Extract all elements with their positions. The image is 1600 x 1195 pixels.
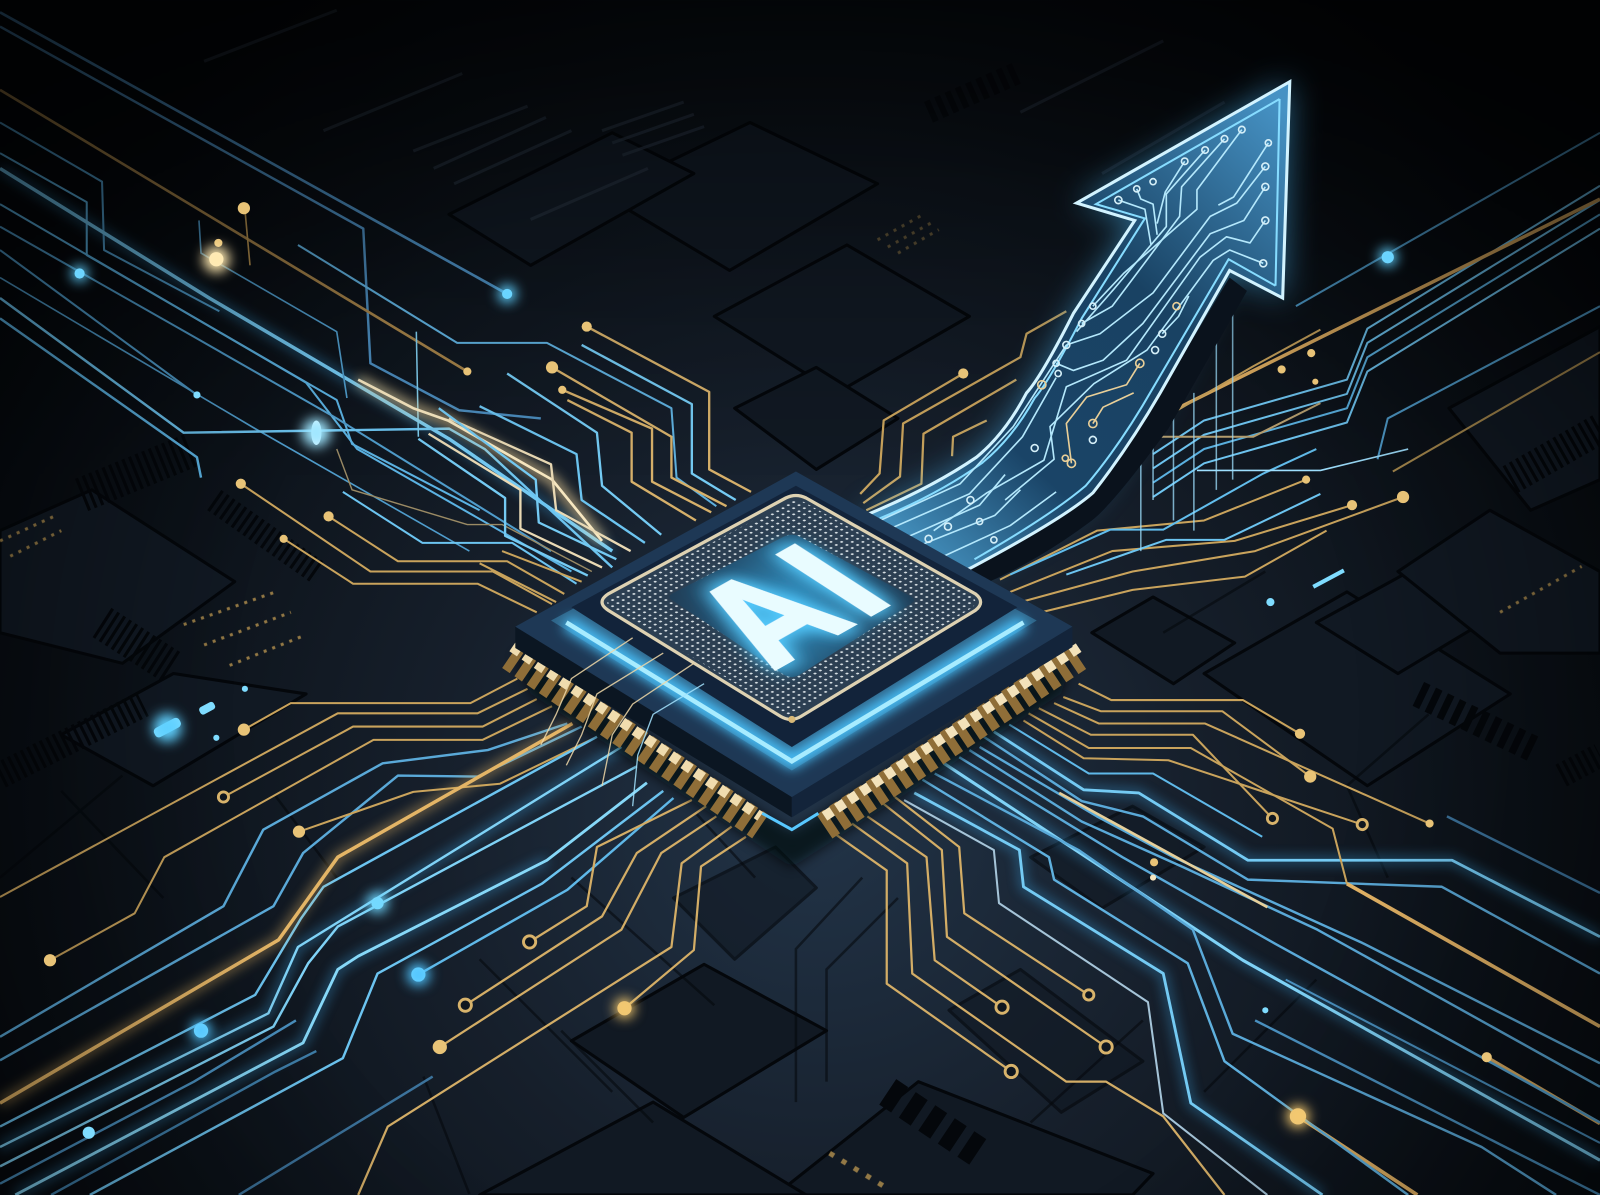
solder dot: [788, 716, 795, 723]
traces: gold behind arrow: [860, 311, 1066, 510]
chip package: [515, 471, 1072, 830]
arrow gold circuit lines: [1038, 303, 1180, 467]
traces: bottom-right gold to pads: [835, 797, 1600, 1195]
traces: lower-left blue bundle: [0, 724, 673, 1195]
thick gold streak lower-left: [0, 724, 572, 1103]
traces: lower-right blue bundles: [904, 725, 1600, 1195]
chip core: [669, 535, 914, 677]
traces: left gold bundle: [241, 484, 582, 612]
rising arrow: [860, 82, 1290, 574]
chip base sides: [515, 627, 792, 817]
traces: lower-left gold bundle: [0, 679, 552, 960]
traces: chip upper-left fan: [418, 327, 751, 576]
arrow side shadow: [960, 278, 1247, 590]
vertical light streaks near arrow: [1141, 306, 1233, 551]
chip pins: [510, 647, 1080, 827]
chip shadow: [515, 653, 1073, 867]
traces: right gold bundle and streak: [1023, 684, 1600, 1027]
rim glow: [566, 622, 1023, 761]
traces: bright streak upper-left: [358, 380, 602, 541]
light wires over pins: [541, 638, 704, 806]
traces: upper-left long lines: [0, 12, 716, 571]
traces: bottom-left gold to pads: [358, 800, 746, 1195]
chip inner block: [571, 486, 1017, 747]
arrow inner border: [880, 99, 1280, 559]
arrow circuit pads: [925, 126, 1271, 543]
board dark structural lines: [0, 449, 1429, 1194]
chip rim: [551, 490, 1037, 770]
arrow inner circuit lines: [873, 130, 1268, 556]
dotted plate: [602, 495, 981, 719]
gold and blue node dots: [44, 202, 1492, 1139]
traces: upper-right bundles: [1000, 133, 1600, 614]
arrow glow: [860, 82, 1290, 574]
faint upper board strokes: [204, 10, 1224, 219]
chip base top: [515, 471, 1072, 797]
node glows: [71, 246, 1397, 1128]
chip underside accent: [762, 813, 818, 830]
chip label: AI: [652, 519, 931, 689]
